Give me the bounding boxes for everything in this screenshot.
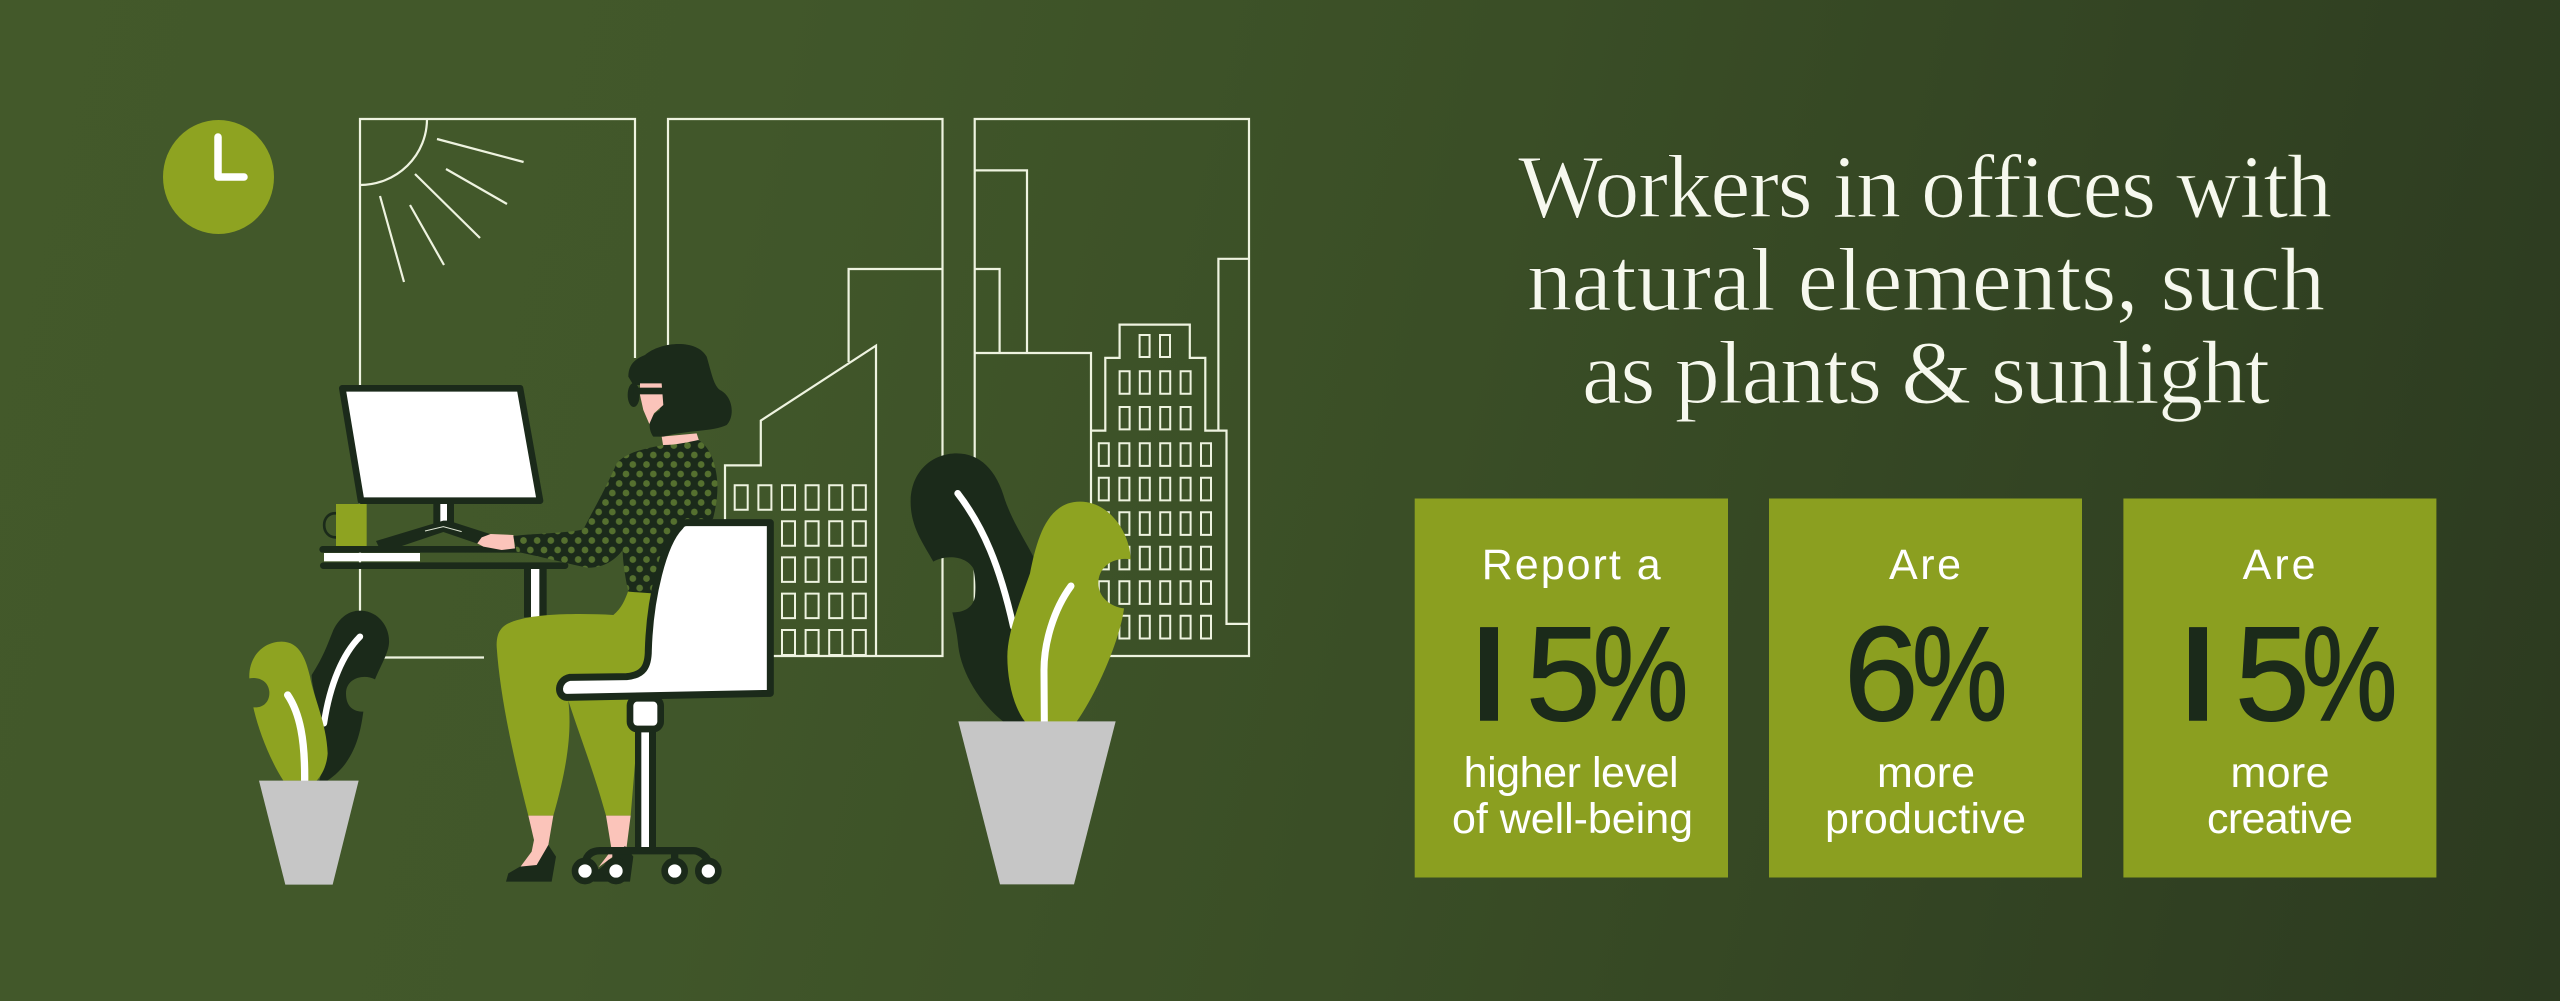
title: as plants & sunlight	[1582, 324, 2270, 423]
ankles	[520, 816, 631, 867]
panel: creativity stat	[2123, 498, 2436, 878]
panel: productivity stat: more	[1877, 749, 1975, 797]
panel: productivity stat	[1769, 498, 2082, 878]
neck	[662, 433, 699, 447]
panel: well-being stat: Report a	[1482, 541, 1661, 589]
window: right with city buildings	[975, 119, 1249, 656]
panel: creativity stat: %	[2302, 599, 2397, 749]
title: natural elements, such	[1527, 231, 2325, 330]
polka dot sweater	[513, 440, 717, 593]
desk top	[319, 546, 568, 569]
chair base with wheels	[575, 851, 718, 881]
panel: well-being stat: %	[1593, 599, 1688, 749]
window: left with sun	[360, 119, 635, 658]
panel: well-being stat	[1415, 498, 1728, 878]
icon: clock	[163, 120, 274, 234]
panel: well-being stat: 5	[1526, 600, 1601, 749]
panel: well-being stat: 1	[1426, 599, 1545, 748]
plant: small potted plant	[249, 611, 389, 885]
panel: productivity stat: productive	[1825, 795, 2026, 843]
panel: productivity stat: %	[1912, 599, 2007, 749]
chair post	[630, 698, 661, 850]
mug	[324, 504, 367, 547]
trousers	[497, 591, 653, 816]
panel: productivity stat: Are	[1889, 541, 1961, 589]
panel: well-being stat: of well-being	[1452, 795, 1693, 843]
chair back and seat	[560, 523, 770, 697]
panel: creativity stat: 1	[2134, 599, 2254, 748]
plant: large potted plant	[911, 453, 1131, 884]
desk leg	[524, 567, 547, 617]
hair	[628, 344, 732, 437]
panel: creativity stat: creative	[2207, 795, 2353, 843]
face	[640, 383, 663, 424]
title: Workers in offices with	[1518, 138, 2332, 237]
person sitting at desk	[477, 344, 732, 882]
glasses	[628, 383, 663, 407]
window: middle with city buildings	[668, 119, 942, 656]
shoes	[506, 845, 633, 882]
hand	[477, 534, 515, 550]
panel: creativity stat: 5	[2235, 600, 2310, 749]
panel: productivity stat: 6	[1844, 600, 1919, 749]
panel: creativity stat: more	[2230, 749, 2330, 797]
panel: well-being stat: higher level	[1464, 749, 1679, 797]
monitor	[342, 388, 540, 547]
desk with monitor and mug	[319, 388, 568, 617]
title	[1518, 138, 2332, 423]
panel: creativity stat: Are	[2243, 541, 2316, 589]
office chair	[560, 523, 770, 881]
